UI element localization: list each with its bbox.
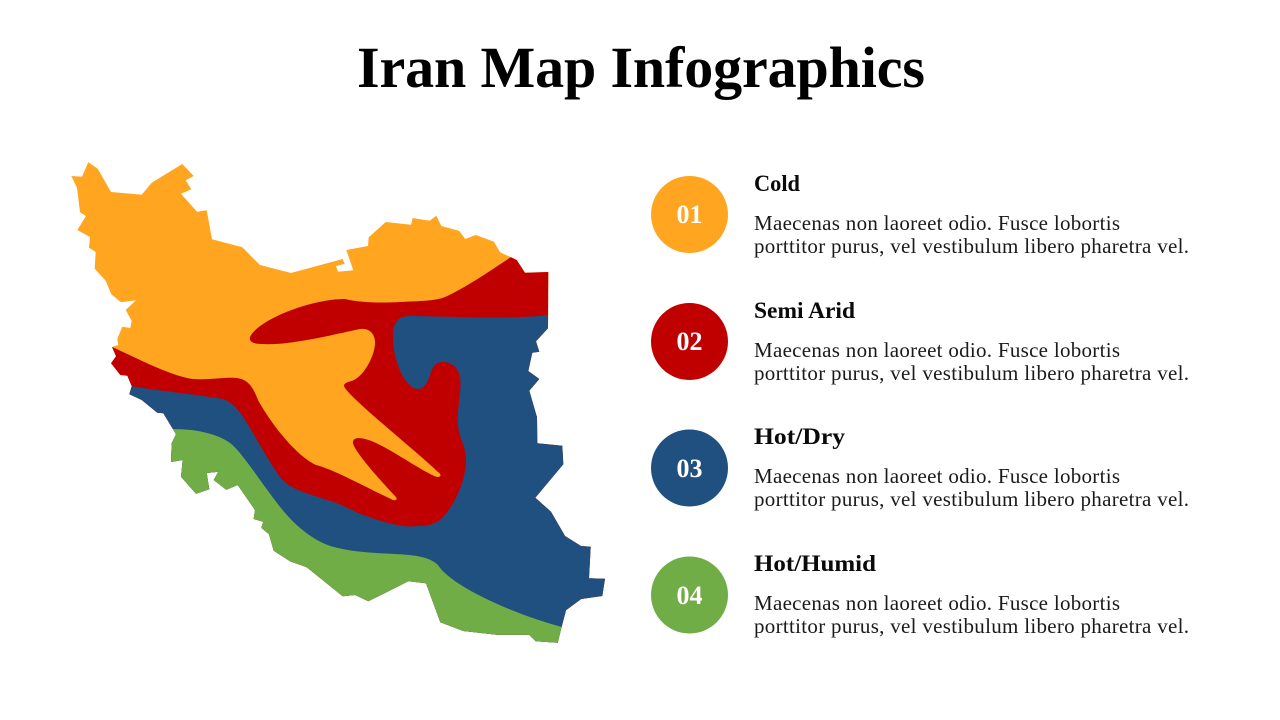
legend item 01: cold [651,171,1189,258]
description 01: Maecenas non laoreet odio. Fusce lobortis [754,211,1120,235]
number 01: 01 [676,200,702,229]
number 04: 04 [676,581,702,610]
badge 03 [651,430,728,506]
map zone: cold [71,162,605,643]
description 02: Maecenas non laoreet odio. Fusce lobortis [754,338,1120,362]
map zone: hot humid [171,428,562,643]
heading: cold: Cold [754,171,800,196]
description 03: Maecenas non laoreet odio. Fusce lobortis [754,464,1120,488]
number 03: 03 [676,454,702,483]
description 01: porttitor purus, vel vestibulum libero pharetra vel. [754,234,1189,258]
heading: semi arid: Semi Arid [754,298,855,323]
badge 02 [651,303,728,380]
badge 04 [651,556,728,634]
badge 01 [651,176,728,253]
legend item 03: hot dry [651,424,1189,511]
heading: hot humid: Hot/Humid [754,551,876,576]
description 02: porttitor purus, vel vestibulum libero pharetra vel. [754,361,1189,385]
number 02: 02 [676,327,702,356]
description 04: Maecenas non laoreet odio. Fusce lobortis [754,591,1120,615]
title: Iran Map Infographics [357,35,925,100]
description 03: porttitor purus, vel vestibulum libero pharetra vel. [754,487,1189,511]
legend item 04: hot humid [651,551,1189,638]
legend item 02: semi arid [651,298,1189,385]
description 04: porttitor purus, vel vestibulum libero pharetra vel. [754,614,1189,638]
map: Iran climate zones [71,162,605,643]
heading: hot dry: Hot/Dry [754,424,846,449]
map zone: hot dry [129,315,605,643]
map zone: semi arid [111,257,605,643]
